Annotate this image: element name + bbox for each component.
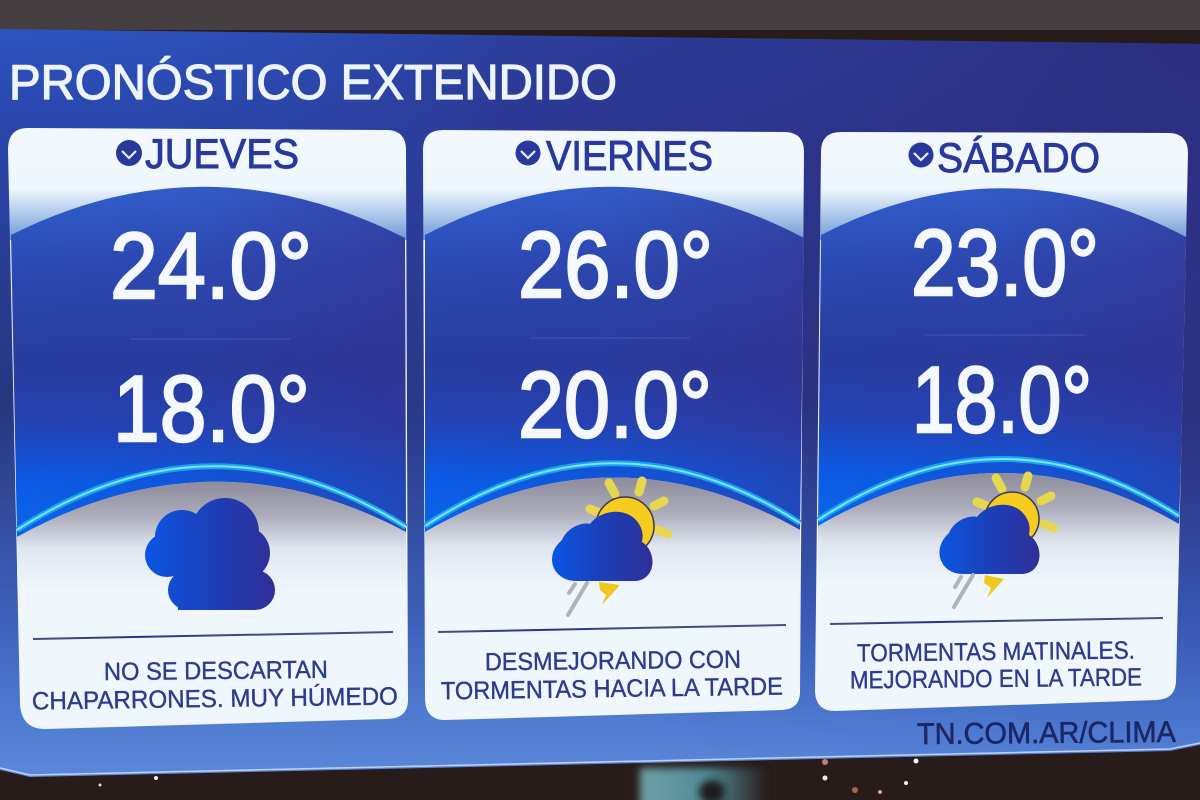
forecast text: TORMENTAS HACIA LA TARDE [441,673,783,705]
day heading: viernes: VIERNES [546,132,713,179]
icon: storm with sun [552,481,668,615]
min temperature: 18.0° [912,347,1092,452]
min temperature: 18.0° [113,356,310,461]
divider [438,625,786,632]
source url: TN.COM.AR/CLIMA [917,716,1176,751]
forecast text: CHAPARRONES. MUY HÚMEDO [32,681,398,716]
forecast text: TORMENTAS MATINALES. [857,637,1135,667]
max temperature: 24.0° [110,213,312,318]
max temperature: 23.0° [911,210,1099,315]
panel: viernes [415,125,815,730]
panel: sabado [810,125,1195,720]
forecast text [441,646,783,705]
panel: jueves [0,125,420,735]
min temperature: 20.0° [518,352,712,457]
forecast text: MEJORANDO EN LA TARDE [850,663,1142,695]
forecast text: NO SE DESCARTAN [104,656,328,686]
icon: cloud [145,498,275,610]
forecast text [32,656,398,716]
max temperature: 26.0° [518,212,713,317]
divider [830,618,1163,624]
title: PRONÓSTICO EXTENDIDO [9,56,617,110]
day heading: sabado: SÁBADO [937,134,1100,181]
forecast text [850,637,1142,695]
divider [33,632,393,639]
day heading: jueves: JUEVES [145,130,299,177]
forecast text: DESMEJORANDO CON [485,646,741,676]
icon: storm with sun [939,476,1054,607]
